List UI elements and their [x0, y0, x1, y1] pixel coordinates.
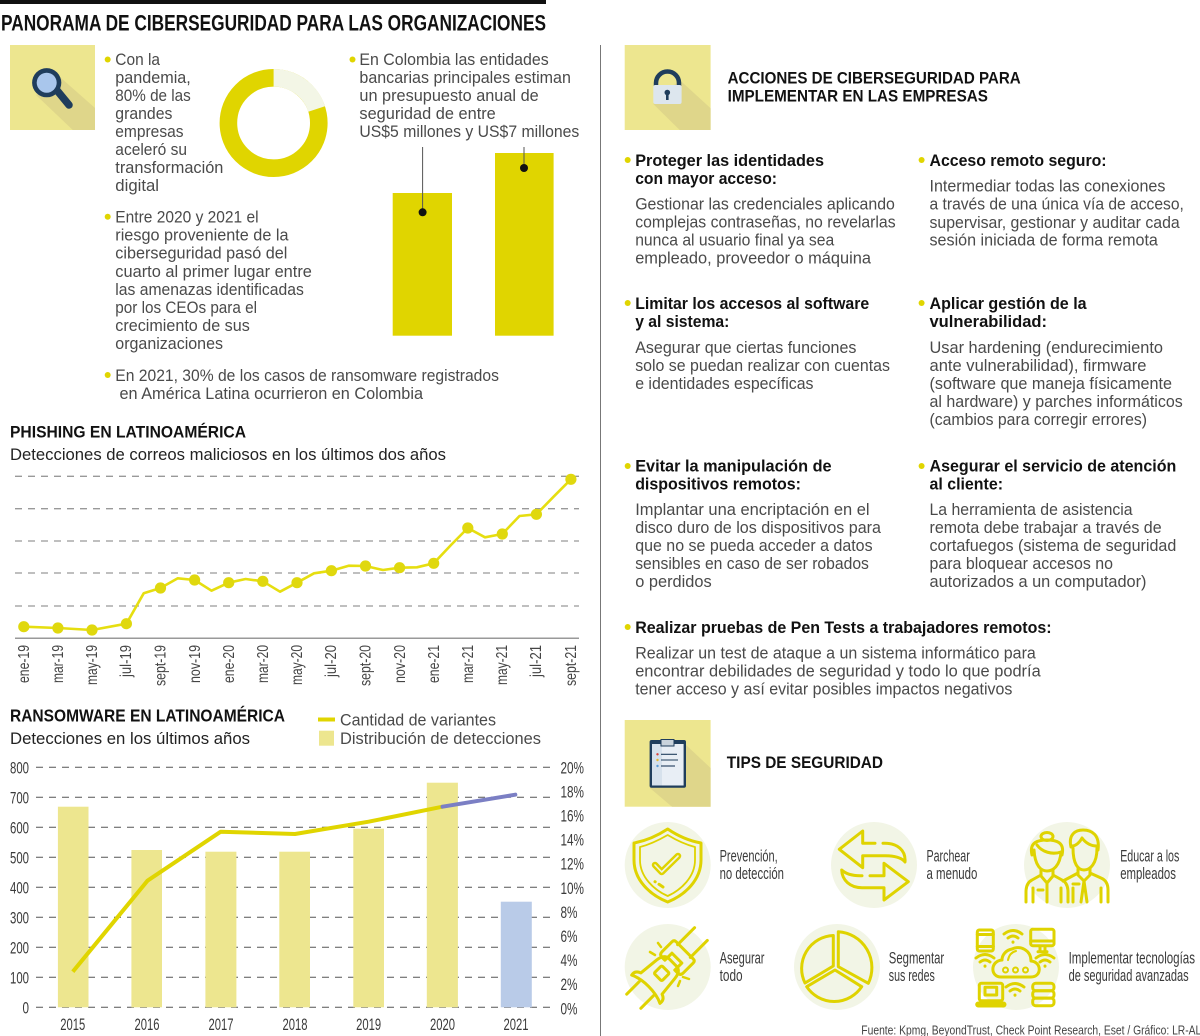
legend: ransomware: Distribución de detecciones: [340, 729, 541, 748]
tip: parchear: a menudo: [926, 865, 977, 883]
text block: riesgo: riesgo proveniente de la: [115, 226, 289, 245]
action: pen tests: Realizar pruebas de Pen Tests a trabajadores remotos:: [635, 618, 1052, 637]
text block: presupuesto bancario: un presupuesto anual de: [359, 86, 539, 105]
line chart: phishing: mar-20: [255, 645, 272, 683]
action: gestión de vulnerabilidad: (software que maneja físicamente: [930, 374, 1172, 393]
text block: pandemia: empresas: [115, 122, 184, 141]
action: manipulación de dispositivos: o perdidos: [635, 572, 712, 591]
icon: clipboard: [625, 720, 711, 807]
icon: padlock: [625, 45, 711, 130]
combo chart: ransomware: 2017: [208, 1016, 234, 1034]
tip: asegurar todo: [620, 920, 765, 1015]
action: servicio de atención: cortafuegos (sistema de seguridad: [930, 536, 1176, 555]
line chart: phishing: nov-19: [187, 645, 204, 683]
combo chart: ransomware: 2020: [430, 1016, 455, 1034]
line chart: phishing: jul-20: [323, 645, 340, 678]
text block: riesgo: [105, 208, 312, 353]
combo chart: ransomware: 2016: [134, 1016, 160, 1034]
action: servicio de atención: autorizados a un computador): [930, 572, 1146, 591]
combo chart: ransomware: 16%: [560, 808, 584, 826]
text block: presupuesto bancario: seguridad de entre: [359, 104, 496, 123]
text block: pandemia: [105, 50, 223, 195]
combo chart: ransomware: 14%: [560, 832, 584, 850]
action: proteger identidades: Proteger las identidades: [635, 151, 824, 170]
combo chart: ransomware: 200: [10, 939, 29, 957]
text block: pandemia: 80% de las: [115, 86, 191, 105]
combo chart: ransomware: 600: [10, 819, 29, 837]
tip: segmentar redes: sus redes: [889, 967, 935, 985]
action: limitar accesos: [625, 294, 890, 393]
line chart: phishing: [15, 474, 580, 686]
tip: parchear: [831, 822, 977, 908]
action: acceso remoto: supervisar, gestionar y auditar cada: [930, 213, 1180, 232]
text block: ransomware en Colombia: [105, 366, 499, 403]
line chart: phishing: may-19: [84, 645, 101, 685]
title: PANORAMA DE CIBERSEGURIDAD PARA LAS ORGANIZACIONES: [1, 10, 546, 36]
combo chart: ransomware: 0%: [560, 1000, 578, 1018]
combo chart: ransomware: 18%: [560, 783, 584, 801]
text block: pandemia: digital: [115, 176, 159, 195]
text block: riesgo: Entre 2020 y 2021 el: [115, 208, 259, 226]
tip: prevención: Prevención,: [720, 848, 778, 866]
text block: riesgo: cuarto al primer lugar entre: [115, 262, 312, 281]
action: manipulación de dispositivos: que no se pueda acceder a datos: [635, 536, 873, 555]
text block: riesgo: ciberseguridad pasó del: [115, 244, 287, 263]
text block: riesgo: las amenazas identificadas: [115, 280, 304, 299]
action: gestión de vulnerabilidad: al hardware) y parches informáticos: [930, 392, 1183, 411]
line chart: phishing: may-20: [289, 645, 306, 685]
text block: pandemia: aceleró su: [115, 140, 187, 159]
combo chart: ransomware: 500: [10, 849, 29, 867]
text block: riesgo: organizaciones: [115, 334, 223, 353]
action: servicio de atención: remota debe trabajar a través de: [930, 518, 1162, 537]
donut chart: 80%: [228, 78, 319, 168]
tip: asegurar todo: Asegurar: [720, 950, 765, 968]
action: manipulación de dispositivos: [625, 456, 882, 591]
line chart: phishing: may-21: [494, 645, 511, 685]
subtitle: ransomware: Detecciones en los últimos años: [10, 729, 250, 748]
tip: prevención: no detección: [720, 865, 784, 883]
tip: segmentar redes: [794, 924, 945, 1010]
tip: prevención: [625, 822, 784, 908]
action: pen tests: [625, 618, 1052, 698]
line chart: phishing: jul-19: [118, 645, 135, 678]
combo chart: ransomware: 4%: [560, 952, 578, 970]
line chart: phishing: sept-19: [152, 645, 170, 686]
legend: ransomware: Cantidad de variantes: [340, 710, 496, 730]
action: gestión de vulnerabilidad: ante vulnerabilidad), firmware: [930, 356, 1146, 375]
line chart: phishing: ene-20: [221, 645, 238, 683]
action: manipulación de dispositivos: dispositivos remotos:: [635, 474, 801, 494]
action: gestión de vulnerabilidad: [919, 294, 1183, 429]
text block: presupuesto bancario: [350, 50, 579, 141]
text block: pandemia: Con la: [115, 50, 160, 69]
combo chart: ransomware: 2019: [356, 1016, 381, 1034]
action: pen tests: Realizar un test de ataque a un sistema informático para: [635, 644, 1036, 662]
action: limitar accesos: e identidades específicas: [635, 374, 814, 393]
tip: tecnologías avanzadas: [973, 924, 1195, 1010]
bar chart: presupuesto: [393, 147, 554, 336]
action: proteger identidades: con mayor acceso:: [635, 169, 777, 188]
icon: magnifying glass: [10, 45, 95, 130]
heading: acciones: [728, 68, 1021, 106]
combo chart: ransomware: 2015: [60, 1016, 85, 1034]
combo chart: ransomware: 20%: [560, 759, 584, 777]
line chart: phishing: sept-20: [358, 645, 374, 686]
legend: ransomware: [318, 710, 541, 748]
text block: presupuesto bancario: En Colombia las entidades: [359, 50, 549, 69]
tip: parchear: Parchear: [926, 848, 970, 866]
action: gestión de vulnerabilidad: (cambios para corregir errores): [930, 410, 1147, 429]
heading: tips: TIPS DE SEGURIDAD: [727, 753, 883, 772]
combo chart: ransomware: 2%: [560, 976, 578, 994]
combo chart: ransomware: 2021: [504, 1016, 528, 1034]
line chart: phishing: sept-21: [563, 645, 580, 686]
text block: ransomware en Colombia: en América Latina ocurrieron en Colombia: [120, 384, 424, 403]
combo chart: ransomware: 8%: [560, 904, 578, 922]
combo chart: ransomware: [10, 759, 584, 1034]
action: pen tests: encontrar debilidades de seguridad y todo lo que podría: [635, 662, 1041, 680]
action: acceso remoto: Acceso remoto seguro:: [930, 151, 1107, 170]
tip: asegurar todo: todo: [720, 967, 743, 985]
tip: segmentar redes: Segmentar: [889, 950, 945, 968]
action: acceso remoto: sesión iniciada de forma remota: [930, 231, 1158, 250]
action: proteger identidades: nunca al usuario final ya sea: [635, 231, 835, 250]
line chart: phishing: ene-19: [16, 645, 33, 683]
action: servicio de atención: La herramienta de asistencia: [930, 500, 1133, 519]
combo chart: ransomware: 800: [10, 759, 29, 777]
action: servicio de atención: para bloquear accesos no: [930, 554, 1113, 573]
combo chart: ransomware: 300: [10, 909, 29, 927]
heading: ransomware: RANSOMWARE EN LATINOAMÉRICA: [10, 704, 285, 726]
action: manipulación de dispositivos: Evitar la manipulación de: [635, 456, 832, 476]
text block: pandemia: transformación: [115, 158, 223, 177]
action: acceso remoto: a través de una única vía de acceso,: [930, 195, 1184, 214]
text block: riesgo: crecimiento de sus: [115, 316, 250, 335]
action: proteger identidades: complejas contraseñas, no revelarlas: [635, 212, 896, 232]
action: servicio de atención: Asegurar el servicio de atención: [930, 456, 1176, 476]
combo chart: ransomware: 700: [10, 789, 29, 807]
action: manipulación de dispositivos: Implantar una encriptación en el: [635, 500, 870, 519]
line chart: phishing: jul-21: [528, 645, 545, 678]
action: manipulación de dispositivos: disco duro de los dispositivos para: [635, 518, 882, 537]
line chart: phishing: mar-19: [50, 645, 67, 683]
action: limitar accesos: Limitar los accesos al software: [635, 294, 869, 313]
action: gestión de vulnerabilidad: vulnerabilidad:: [930, 312, 1047, 331]
text block: ransomware en Colombia: En 2021, 30% de los casos de ransomware registrados: [115, 366, 499, 385]
heading: phishing: PHISHING EN LATINOAMÉRICA: [10, 422, 246, 442]
action: acceso remoto: [919, 151, 1184, 250]
combo chart: ransomware: 2018: [282, 1016, 308, 1034]
tip: educar empleados: empleados: [1120, 865, 1176, 883]
action: limitar accesos: y al sistema:: [635, 312, 729, 331]
heading: acciones: ACCIONES DE CIBERSEGURIDAD PARA: [728, 68, 1021, 88]
combo chart: ransomware: 100: [10, 969, 29, 987]
text block: presupuesto bancario: bancarias principales estiman: [359, 68, 571, 87]
action: proteger identidades: empleado, proveedor o máquina: [635, 249, 872, 268]
action: manipulación de dispositivos: sensibles en caso de ser robados: [635, 554, 869, 573]
text block: pandemia: grandes: [115, 104, 172, 123]
action: gestión de vulnerabilidad: Usar hardening (endurecimiento: [930, 338, 1163, 357]
heading: acciones: IMPLEMENTAR EN LAS EMPRESAS: [728, 86, 988, 106]
action: proteger identidades: Gestionar las credenciales aplicando: [635, 194, 895, 214]
combo chart: ransomware: 6%: [560, 928, 578, 946]
action: pen tests: tener acceso y así evitar posibles impactos negativos: [635, 680, 1012, 698]
combo chart: ransomware: 400: [10, 879, 29, 897]
text block: presupuesto bancario: US$5 millones y US$7 millones: [359, 122, 579, 141]
action: proteger identidades: [625, 151, 896, 268]
line chart: phishing: nov-20: [392, 645, 409, 683]
text block: pandemia: pandemia,: [115, 68, 191, 87]
subtitle: phishing: Detecciones de correos maliciosos en los últimos dos años: [10, 445, 446, 464]
tip: educar empleados: [1024, 822, 1179, 908]
action: servicio de atención: [919, 456, 1176, 591]
action: limitar accesos: solo se puedan realizar con cuentas: [635, 356, 890, 375]
action: servicio de atención: al cliente:: [930, 474, 1003, 494]
line chart: phishing: mar-21: [460, 645, 477, 683]
text block: riesgo: por los CEOs para el: [115, 298, 257, 317]
action: acceso remoto: Intermediar todas las conexiones: [930, 177, 1165, 196]
combo chart: ransomware: 0: [22, 999, 29, 1017]
action: gestión de vulnerabilidad: Aplicar gestión de la: [930, 294, 1087, 313]
combo chart: ransomware: 12%: [560, 856, 584, 874]
action: limitar accesos: Asegurar que ciertas funciones: [635, 338, 856, 357]
line chart: phishing: ene-21: [426, 645, 443, 683]
combo chart: ransomware: 10%: [560, 880, 584, 898]
